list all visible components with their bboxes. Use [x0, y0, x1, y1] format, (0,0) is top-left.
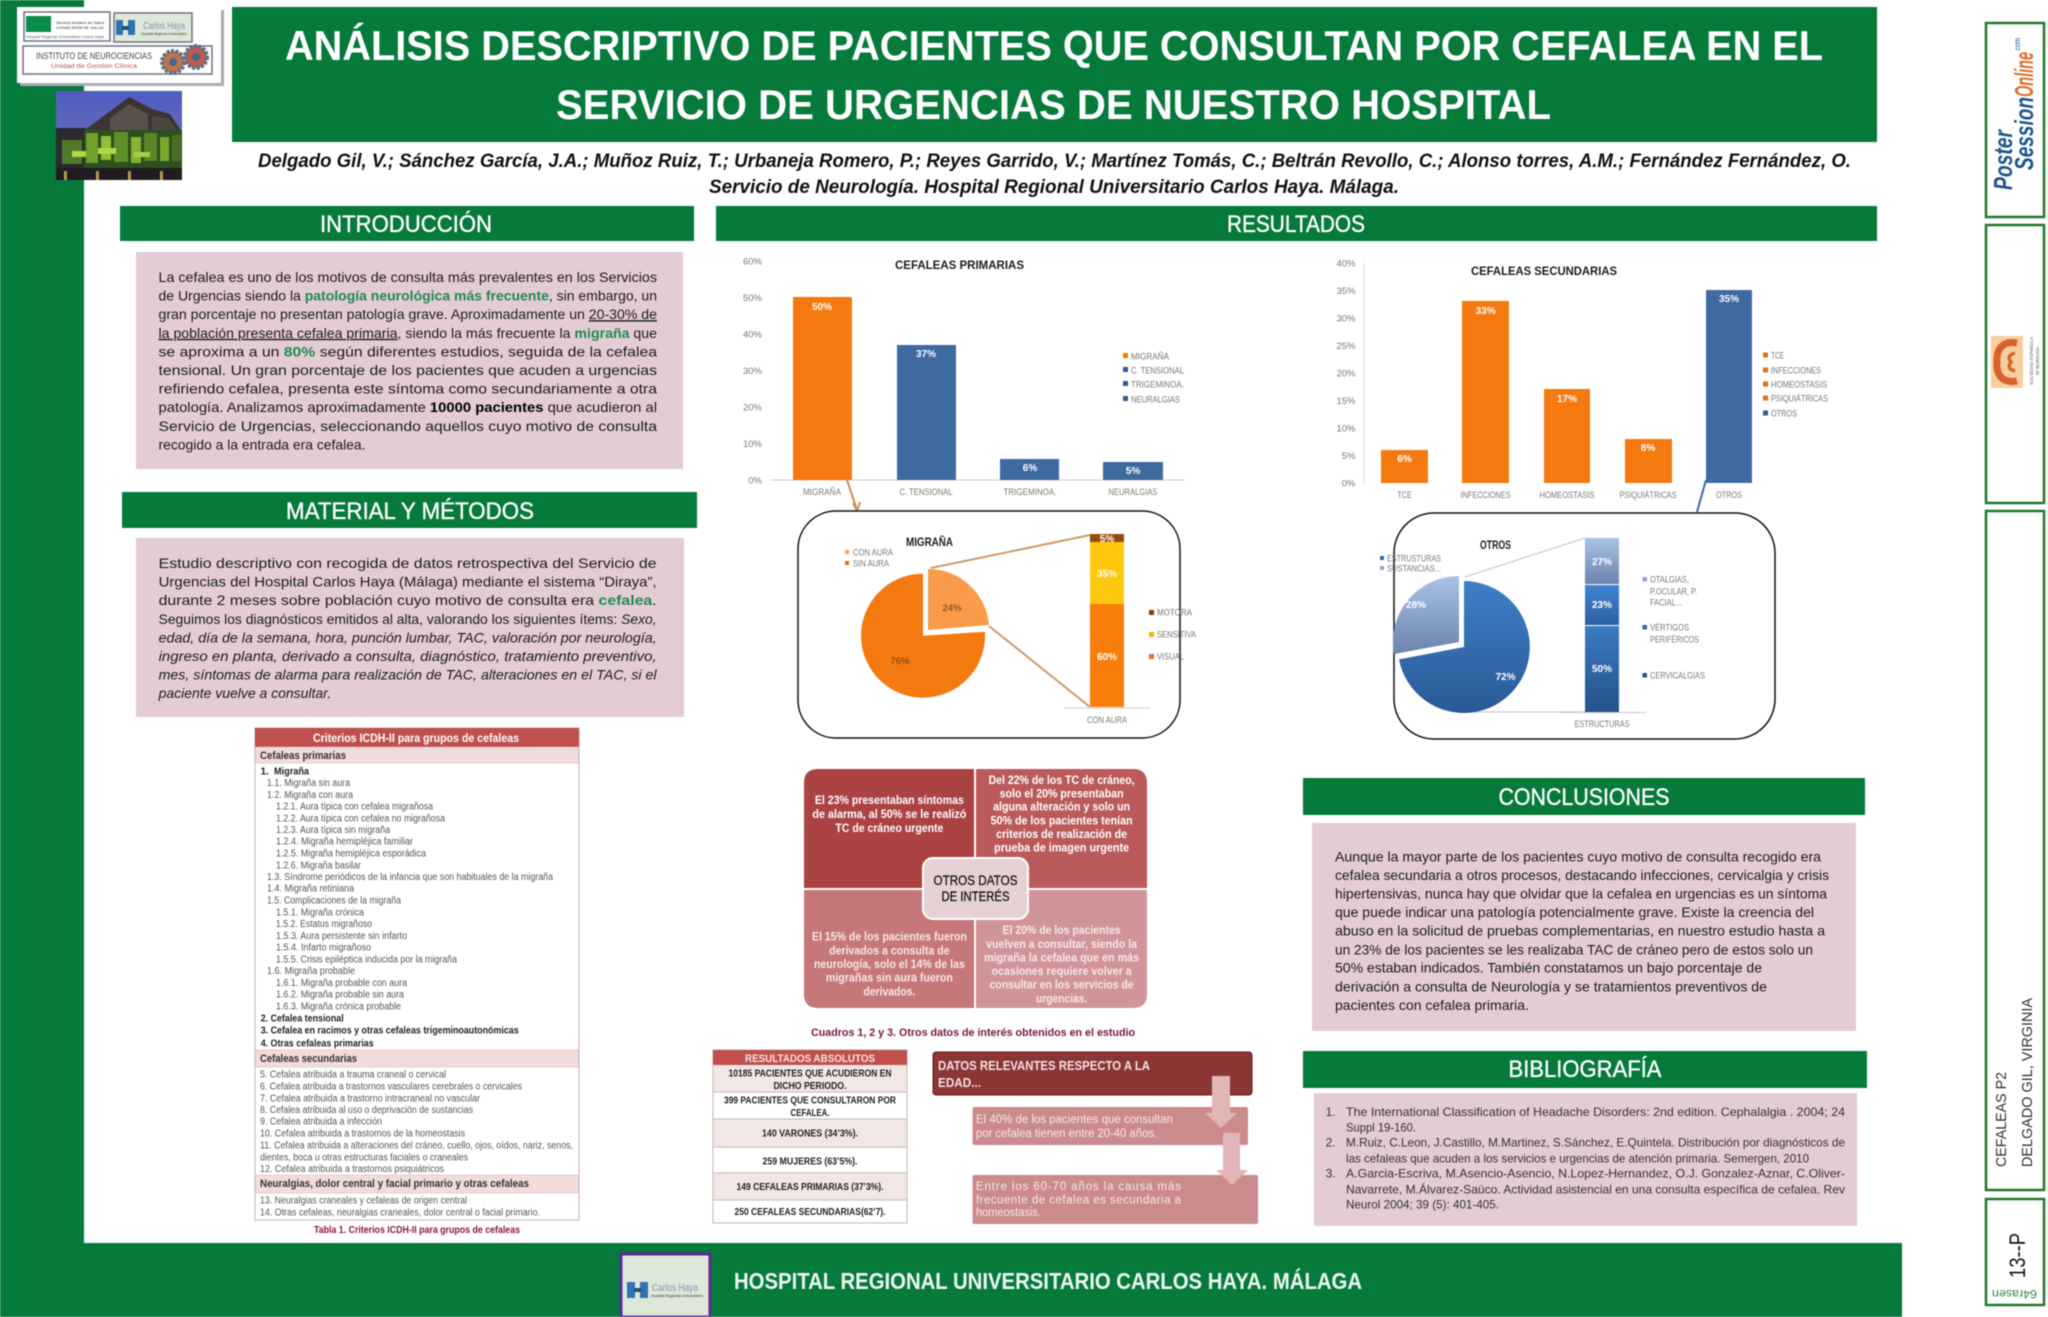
side legend: SENSITIVA: [1157, 630, 1197, 640]
side box: PosterSessionOnline logo: Poster: [1988, 129, 2018, 190]
logo: Servicio Andaluz de Salud: Servicio Andaluz de Salud: [56, 20, 104, 25]
table rows: 149 CEFALEAS PRIMARIAS (37’3%).: [736, 1182, 884, 1193]
section: cefaleas primarias: 1.: [260, 767, 269, 778]
table rows: 10185 PACIENTES QUE ACUDIERON EN: [728, 1069, 892, 1080]
panel: bibliografía: Suppl 19-160.: [1346, 1120, 1416, 1134]
heading: resultados: [716, 206, 1877, 241]
section: cefaleas primarias: Migraña: [274, 767, 309, 778]
y axis labels: 40%: [1336, 258, 1356, 270]
legend: TCE: [1771, 350, 1784, 362]
panel: conclusiones: derivación a consulta de Neurología y se tratamientos preventivos de: [1335, 978, 1767, 994]
table rows: 140 VARONES (34’3%).: [762, 1129, 858, 1140]
arrow: otros to detail: [1697, 480, 1706, 512]
panel: conclusiones: que puede indicar una patología potencialmente grave. Existe la creencia del: [1335, 904, 1814, 920]
y axis labels: 35%: [1336, 286, 1356, 297]
panel: introducción: [136, 252, 683, 469]
table caption: Tabla 1. Criterios ICDH-II para grupos de cefaleas: [314, 1225, 520, 1236]
panel: introducción: de Urgencias siendo la patología neurológica más frecuente, sin embargo, un: [158, 288, 657, 304]
quadrant: vuelven a consultar: consultar en los servicios de: [990, 978, 1134, 992]
section: cefaleas primarias: 1.5.2. Estatus migrañoso: [276, 919, 372, 930]
bars: [1381, 290, 1752, 483]
box: 60-70 años: [972, 1175, 1258, 1224]
table rows: [724, 1069, 897, 1218]
table rows: DICHO PERIODO.: [774, 1081, 847, 1092]
section: cefaleas primarias: [256, 747, 578, 1049]
quadrant: derivación a neurología: derivados a consulta de: [829, 944, 950, 958]
section: cefaleas secundarias: 8. Cefalea atribuida al uso o deprivación de sustancias: [260, 1105, 473, 1116]
legend: [845, 548, 894, 570]
side legend: PERIFÉRICOS: [1650, 634, 1699, 646]
authors: Delgado Gil, V.; Sánchez García, J.A.; Muñoz Ruiz, T.; Urbaneja Romero, P.; Reyes Garrido, V.; Martínez Tomás, C.; Beltrán Revollo, C.; Alonso torres, A.M.; Fernández Fernández, O.: [258, 151, 1851, 172]
panel: material y métodos: edad, día de la semana, hora, punción lumbar, TAC, valoración por neurología,: [159, 629, 657, 645]
hospital photo: [56, 91, 182, 180]
stacked bar: 23%: [1592, 600, 1612, 611]
table header: [255, 728, 579, 747]
y axis labels: 20%: [743, 402, 763, 414]
pie chart: [1393, 576, 1530, 713]
panel: bibliografía: The International Classification of Headache Disorders: 2nd edition. Cephalalgia . 2004; 24: [1346, 1105, 1845, 1119]
side legend: CERVICALGIAS: [1650, 670, 1705, 682]
section: cefaleas primarias: 2. Cefalea tensional: [261, 1013, 344, 1024]
stacked bar: 5%: [1100, 534, 1114, 545]
side box: poster data: DELGADO GIL, VIRGINIA: [2019, 998, 2036, 1167]
panel: material y métodos: Urgencias del Hospital Carlos Haya (Málaga) mediante el sistema “Diraya”,: [159, 574, 657, 590]
category labels: INFECCIONES: [1461, 490, 1511, 501]
side box: PosterSessionOnline logo: Session: [2009, 97, 2039, 170]
panel: bibliografía: las cefaleas que acuden a los servicios e urgencias de atención primaria. Semergen, 2010: [1346, 1151, 1809, 1165]
y axis labels: 40%: [743, 330, 763, 340]
panel: material y métodos: durante 2 meses sobre población cuyo motivo de consulta era cefalea .: [159, 592, 657, 608]
legend: MIGRAÑA: [1131, 352, 1170, 362]
side legend: VÉRTIGOS: [1650, 622, 1689, 634]
section: neuralgias: [256, 1175, 578, 1218]
authors: [258, 151, 1851, 198]
side legend: [1642, 574, 1705, 682]
quadrant: TC de cráneo: alguna alteración y solo un: [993, 800, 1130, 814]
section: cefaleas primarias: 3. Cefalea en racimos y otras cefaleas trigeminoautonómicas: [261, 1026, 519, 1037]
side box: poster code: [1986, 1199, 2044, 1305]
quadrant: derivación a neurología: migrañas sin aura fueron: [826, 971, 953, 985]
legend: [1380, 554, 1441, 574]
legend: C. TENSIONAL: [1131, 366, 1184, 376]
panel: material y métodos: Seguimos los diagnósticos emitidos al alta, valorando los siguientes ítems: Sexo,: [159, 611, 657, 627]
logo: Instituto de Neurociencias: [23, 46, 212, 74]
box: 20-40 años: [972, 1107, 1248, 1145]
legend: [1123, 352, 1184, 406]
y axis labels: 10%: [743, 439, 763, 450]
heading box: datos relevantes: [933, 1052, 1252, 1095]
bars: 33%: [1476, 306, 1496, 317]
section: cefaleas secundarias: dientes, boca u otras estructuras faciales o craneales: [260, 1152, 468, 1163]
table header: RESULTADOS ABSOLUTOS: [745, 1053, 875, 1065]
panel: conclusiones: 50% estaban indicados. También constatamos un bajo porcentaje de: [1335, 960, 1762, 976]
panel: bibliografía: Neurol 2004; 39 (5): 401-405.: [1346, 1198, 1499, 1212]
bars: 5%: [1126, 466, 1140, 477]
side box: poster code: 64rasen: [1992, 1287, 2037, 1301]
connector lines: [1464, 538, 1585, 712]
legend: TRIGEMINOA.: [1131, 380, 1184, 390]
footer logo: Carlos Haya: [652, 1283, 698, 1294]
bars: 37%: [916, 349, 936, 360]
box: 60-70 años: homeostasis.: [976, 1207, 1041, 1219]
panel: conclusiones: un 23% de los pacientes se les realizaba TAC de cráneo pero de estos solo un: [1335, 941, 1813, 957]
section: cefaleas primarias: 1.4. Migraña retiniana: [267, 884, 354, 895]
heading: conclusiones: CONCLUSIONES: [1498, 784, 1670, 811]
panel: introducción: refiriendo cefalea, presenta este síntoma como secundariamente a otra: [158, 381, 657, 397]
stacked bar: 35%: [1097, 569, 1117, 580]
section: cefaleas primarias: 1.6.3. Migraña crónica probable: [276, 1002, 401, 1013]
legend: [1763, 350, 1828, 420]
quadrant: derivación a neurología: El 15% de los pacientes fueron: [812, 930, 967, 944]
legend: SIN AURA: [853, 558, 890, 570]
quadrant: vuelven a consultar: migraña la cefalea que en más: [984, 950, 1139, 964]
box: 20-40 años: El 40% de los pacientes que consultan: [976, 1114, 1173, 1126]
category labels: OTROS: [1716, 490, 1742, 501]
y axis labels: 30%: [1336, 314, 1356, 324]
quadrant: TC de cráneo: [976, 769, 1147, 888]
section: cefaleas secundarias: [256, 1050, 578, 1175]
section: cefaleas primarias: 1.5.4. Infarto migrañoso: [276, 943, 371, 954]
bars: 6%: [1397, 454, 1412, 465]
matrix caption: Cuadros 1, 2 y 3. Otros datos de interés obtenidos en el estudio: [811, 1027, 1135, 1039]
category labels: TCE: [1398, 490, 1412, 501]
quadrant: síntomas de alarma: El 23% presentaban síntomas: [815, 793, 964, 807]
footer logo: Hospital Regional Universitario: [651, 1293, 704, 1298]
bar chart: cefaleas secundarias: [1336, 258, 1828, 501]
connector lines: [931, 535, 1090, 707]
panel: conclusiones: [1312, 823, 1856, 1031]
quadrant: síntomas de alarma: de alarma, al 50% se le realizó: [812, 807, 966, 821]
panel: introducción: La cefalea es uno de los motivos de consulta más prevalentes en los Servicios: [158, 269, 657, 285]
chart title: CEFALEAS PRIMARIAS: [895, 258, 1024, 272]
section: cefaleas primarias: 1.2.5. Migraña hemipléjica esporádica: [276, 848, 426, 859]
section: cefaleas primarias: 1.5.1. Migraña crónica: [276, 907, 364, 918]
category labels: C. TENSIONAL: [900, 487, 952, 498]
side box: Sociedad Española de Neurología logo: DE NEUROLOGÍA: [2034, 347, 2040, 375]
panel: introducción: tensional. Un gran porcentaje de los pacientes que acuden a urgencias: [158, 362, 657, 378]
heading: bibliografía: [1303, 1051, 1867, 1088]
section: cefaleas primarias: 1.3. Síndrome periódicos de la infancia que son habituales de la migraña: [267, 872, 553, 883]
logos block: [17, 7, 224, 86]
legend: ESTRUSTURAS: [1387, 554, 1441, 564]
heading: material y métodos: MATERIAL Y MÉTODOS: [286, 498, 534, 525]
heading: bibliografía: BIBLIOGRAFÍA: [1508, 1056, 1662, 1083]
panel: introducción: recogido a la entrada era cefalea.: [158, 436, 366, 452]
section: cefaleas primarias: 1.1. Migraña sin aura: [267, 778, 350, 789]
title banner: [232, 7, 1877, 142]
title line 2: SERVICIO DE URGENCIAS DE NUESTRO HOSPITAL: [556, 81, 1551, 128]
panel: introducción: la población presenta cefalea primaria, siendo la más frecuente la migraña que: [158, 325, 657, 341]
affiliation: Servicio de Neurología. Hospital Regional Universitario Carlos Haya. Málaga.: [709, 177, 1399, 198]
panel: conclusiones: hipertensivas, nunca hay que olvidar que la cefalea en urgencias es un síntoma: [1335, 886, 1827, 902]
chart title: OTROS: [1480, 538, 1511, 552]
table: criterios ICDH-II: [255, 728, 579, 1220]
stacked bar: 60%: [1097, 652, 1117, 663]
y axis labels: 0%: [748, 476, 763, 486]
arrow: down 1: [1205, 1076, 1237, 1128]
y axis labels: 30%: [743, 366, 763, 377]
bars: 8%: [1641, 443, 1655, 454]
category labels: PSIQUIÁTRICAS: [1620, 490, 1676, 501]
section: cefaleas secundarias: 6. Cefalea atribuida a trastornos vasculares cerebrales o cervicales: [260, 1081, 522, 1092]
y axis labels: 10%: [1336, 424, 1356, 434]
y axis labels: 5%: [1342, 451, 1356, 462]
section: cefaleas primarias: Cefaleas primarias: [260, 750, 346, 762]
y axis labels: [743, 256, 763, 486]
center box: [923, 858, 1028, 919]
y axis labels: 25%: [1336, 341, 1356, 352]
quadrant: vuelven a consultar: vuelven a consultar, siendo la: [986, 937, 1137, 951]
quadrant: TC de cráneo: criterios de realización de: [996, 827, 1127, 841]
heading box: datos relevantes: DATOS RELEVANTES RESPECTO A LA: [938, 1058, 1151, 1073]
panel: bibliografía: M.Ruiz, C.Leon, J.Castillo, M.Martinez, S.Sánchez, E.Quintela. Distribución por diagnósticos de: [1346, 1136, 1845, 1150]
stacked bar: [1064, 534, 1150, 726]
section: neuralgias: 13. Neuralgias craneales y cefaleas de origen central: [260, 1196, 467, 1207]
panel: otros detail chart: [1380, 513, 1775, 739]
logo: Carlos Haya: Hospital Regional Universitario: [141, 32, 187, 36]
panel: bibliografía: 2.: [1326, 1136, 1336, 1150]
legend: PSIQUIÁTRICAS: [1771, 394, 1828, 404]
chart title: MIGRAÑA: [906, 534, 953, 549]
quadrant: TC de cráneo: 50% de los pacientes tenían: [991, 814, 1133, 828]
title line 1: ANÁLISIS DESCRIPTIVO DE PACIENTES QUE CONSULTAN POR CEFALEA EN EL: [285, 22, 1823, 69]
section: cefaleas primarias: 1.5. Complicaciones de la migraña: [267, 895, 401, 906]
quadrant: derivación a neurología: neurología, solo el 14% de las: [814, 957, 965, 971]
heading box: datos relevantes: EDAD...: [938, 1075, 981, 1090]
section: cefaleas primarias: 1.2.6. Migraña basilar: [276, 860, 362, 871]
panel: material y métodos: paciente vuelve a consultar.: [158, 685, 331, 701]
quadrant: vuelven a consultar: urgencias.: [1036, 991, 1087, 1005]
section: cefaleas primarias: 1.5.3. Aura persistente sin infarto: [276, 931, 407, 942]
section: cefaleas secundarias: Cefaleas secundarias: [260, 1053, 357, 1065]
side legend: P.OCULAR, P.: [1650, 586, 1697, 598]
center box: OTROS DATOS: [934, 872, 1018, 888]
side box: PosterSessionOnline logo: .com: [2013, 38, 2022, 52]
y axis labels: 0%: [1342, 478, 1356, 490]
logo: Carlos Haya: [114, 13, 192, 42]
box: 60-70 años: frecuente de cefalea es secundaria a: [976, 1194, 1182, 1206]
panel: conclusiones: Aunque la mayor parte de los pacientes cuyo motivo de consulta recogido era: [1335, 848, 1821, 864]
quadrant: TC de cráneo: prueba de imagen urgente: [994, 841, 1129, 855]
quadrant: derivación a neurología: [804, 890, 974, 1008]
quadrant: síntomas de alarma: [804, 769, 974, 888]
section: cefaleas secundarias: 11. Cefalea atribuida a alteraciones del cráneo, cuello, ojos, oídos, nariz, senos,: [260, 1140, 573, 1151]
category labels: NEURALGIAS: [1108, 487, 1158, 498]
center box: DE INTERÉS: [942, 888, 1010, 904]
panel: introducción: gran porcentaje no presentan patología grave. Aproximadamente un 20-30% de: [158, 306, 657, 322]
heading: introducción: [120, 206, 694, 241]
chart title: CEFALEAS SECUNDARIAS: [1471, 264, 1617, 278]
quadrant: vuelven a consultar: [976, 890, 1147, 1008]
side box: PosterSessionOnline logo: [1986, 23, 2044, 217]
quadrant: TC de cráneo: solo el 20% presentaban: [1000, 786, 1124, 800]
category labels: [803, 487, 1158, 498]
stacked bar: [1560, 538, 1646, 730]
heading: introducción: INTRODUCCIÓN: [320, 211, 492, 238]
legend: SUSTANCIAS...: [1387, 564, 1441, 574]
side legend: VISUAL: [1157, 652, 1184, 662]
arrow: migraña to detail: [847, 480, 860, 511]
section: cefaleas primarias: 4. Otras cefaleas primarias: [261, 1038, 374, 1049]
logo: Carlos Haya: Carlos Haya: [143, 21, 185, 32]
side legend: FACIAL...: [1650, 598, 1682, 608]
section: neuralgias: 14. Otras cefaleas, neuralgias craneales, dolor central o facial primario.: [260, 1207, 540, 1218]
table: resultados absolutos: [713, 1050, 907, 1223]
bar chart: cefaleas primarias: [743, 256, 1185, 498]
bars: 50%: [812, 302, 832, 313]
matrix: otros datos de interés: [804, 769, 1147, 1008]
section: cefaleas secundarias: 9. Cefalea atribuida a infección: [260, 1117, 382, 1128]
bars: 17%: [1557, 394, 1577, 405]
heading: material y métodos: [122, 492, 697, 528]
stacked bar: CON AURA: [1087, 715, 1128, 726]
category labels: [1398, 490, 1742, 501]
quadrant: derivación a neurología: derivados.: [863, 984, 915, 998]
panel: material y métodos: mes, síntomas de alarma para realización de TAC, alteraciones en el TAC, si el: [159, 667, 657, 683]
quadrant: síntomas de alarma: TC de cráneo urgente: [835, 821, 944, 835]
section: cefaleas primarias: 1.5.5. Crisis epiléptica inducida por la migraña: [276, 954, 457, 965]
panel: material y métodos: Estudio descriptivo con recogida de datos retrospectiva del Servicio de: [159, 555, 657, 571]
pie chart: 28%: [1406, 600, 1426, 611]
legend: OTROS: [1771, 408, 1797, 420]
side legend: OTALGIAS,: [1650, 574, 1689, 586]
section: cefaleas primarias: 1.2. Migraña con aura: [267, 790, 353, 801]
panel: conclusiones: cefalea secundaria a otros procesos, destacando infecciones, cervicalgia y crisis: [1335, 867, 1829, 883]
arrow: down 2: [1216, 1133, 1248, 1185]
section: cefaleas secundarias: 10. Cefalea atribuida a trastornos de la homeostasis: [260, 1128, 465, 1139]
y axis labels: [1336, 258, 1356, 490]
box: 20-40 años: por cefalea tienen entre 20-40 años.: [976, 1128, 1157, 1140]
category labels: MIGRAÑA: [803, 487, 842, 498]
category labels: TRIGEMINOA.: [1004, 487, 1056, 498]
y axis labels: 20%: [1336, 368, 1356, 380]
side box: poster code: 13--P: [2005, 1233, 2030, 1278]
legend: INFECCIONES: [1771, 366, 1821, 376]
logo: Servicio Andaluz de Salud: CONSEJERÍA DE SALUD: [56, 25, 104, 30]
footer band: [0, 1243, 1902, 1317]
side box: Sociedad Española de Neurología logo: [1986, 225, 2044, 503]
bars: 6%: [1023, 463, 1037, 474]
side box: poster data: [1986, 511, 2044, 1190]
side box: PosterSessionOnline logo: Online: [2009, 52, 2039, 97]
y axis labels: 50%: [743, 293, 763, 304]
y axis labels: 15%: [1336, 396, 1356, 407]
left green sidebar: [0, 0, 84, 1250]
logo: Servicio Andaluz de Salud: Hospital Regional Universitario Carlos Haya: [26, 35, 105, 39]
table rows: CEFALEA.: [790, 1108, 830, 1119]
logo: Instituto de Neurociencias: INSTITUTO DE NEUROCIENCIAS: [36, 51, 152, 61]
panel: material y métodos: ingreso en planta, derivado a consulta, diagnóstico, tratamiento preventivo,: [159, 648, 657, 664]
section: cefaleas primarias: 1.6.2. Migraña probable sin aura: [276, 990, 404, 1001]
bars: 35%: [1719, 294, 1739, 305]
panel: bibliografía: A.Garcia-Escriva, M.Asencio-Asencio, N.Lopez-Hernandez, O.J. Gonzalez-Aznar, C.Oliver-: [1346, 1167, 1845, 1181]
pie chart: 24%: [942, 603, 962, 614]
section: cefaleas secundarias: 12. Cefalea atribuida a trastornos psiquiátricos: [260, 1164, 444, 1175]
panel: bibliografía: Navarrete, M.Álvarez-Saúco. Actividad asistencial en una consulta específica de cefalea. Rev: [1346, 1181, 1845, 1196]
panel: conclusiones: abuso en la solicitud de pruebas complementarias, en nuestro estudio hasta a: [1335, 923, 1825, 939]
panel: introducción: patología. Analizamos aproximadamente 10000 pacientes que acudieron al: [158, 399, 657, 415]
quadrant: vuelven a consultar: ocasiones requiere volver a: [992, 964, 1132, 978]
table rows: 399 PACIENTES QUE CONSULTARON POR: [724, 1095, 897, 1106]
legend: CON AURA: [853, 548, 894, 558]
table rows: 250 CEFALEAS SECUNDARIAS(62’7).: [734, 1207, 886, 1218]
panel: conclusiones: pacientes con cefalea primaria.: [1335, 997, 1529, 1013]
pie chart: 76%: [890, 656, 910, 667]
panel: bibliografía: [1314, 1093, 1857, 1226]
legend: NEURALGIAS: [1131, 394, 1180, 406]
side legend: [1149, 608, 1197, 662]
y axis labels: 60%: [743, 256, 763, 268]
quadrant: vuelven a consultar: El 20% de los pacientes: [1003, 923, 1121, 937]
section: cefaleas primarias: 1.2.2. Aura típica con cefalea no migrañosa: [276, 813, 445, 824]
side box: poster data: CEFALEAS P2: [1993, 1072, 2010, 1167]
footer text: HOSPITAL REGIONAL UNIVERSITARIO CARLOS HAYA. MÁLAGA: [734, 1267, 1362, 1294]
stacked bar: ESTRUCTURAS: [1574, 719, 1630, 730]
section: cefaleas primarias: 1.2.3. Aura típica sin migraña: [276, 825, 390, 836]
section: neuralgias: Neuralgias, dolor central y facial primario y otras cefaleas: [260, 1178, 529, 1190]
section: cefaleas primarias: 1.6. Migraña probable: [267, 966, 355, 977]
legend: HOMEOSTASIS: [1771, 380, 1827, 390]
heading: resultados: RESULTADOS: [1227, 211, 1365, 238]
panel: material y métodos: [136, 538, 684, 717]
pie chart: [861, 569, 989, 698]
category labels: HOMEOSTASIS: [1540, 490, 1594, 501]
section: cefaleas primarias: 1.2.4. Migraña hemipléjica familiar: [276, 837, 414, 848]
panel: bibliografía: 3.: [1326, 1167, 1336, 1181]
panel: introducción: Servicio de Urgencias, seleccionando aquellos cuyo motivo de consulta: [158, 418, 657, 434]
stacked bar: 50%: [1592, 664, 1612, 675]
panel: migraña detail chart: [798, 511, 1197, 738]
bars: [793, 297, 1163, 480]
heading: conclusiones: [1303, 778, 1865, 815]
section: cefaleas primarias: 1.6.1. Migraña probable con aura: [276, 978, 407, 989]
panel: bibliografía: 1.: [1326, 1105, 1336, 1119]
pie chart: 72%: [1495, 672, 1516, 683]
logo: Servicio Andaluz de Salud: [24, 12, 110, 41]
table header: [713, 1050, 907, 1065]
side legend: MOTORA: [1157, 608, 1193, 618]
table rows: 259 MUJERES (63’5%).: [762, 1156, 858, 1167]
logo: Instituto de Neurociencias: Unidad de Gestión Clínica: [51, 63, 137, 70]
quadrant: TC de cráneo: Del 22% de los TC de cráneo,: [989, 773, 1135, 787]
panel: introducción: se aproxima a un 80% según diferentes estudios, seguida de la cefalea: [158, 343, 657, 359]
section: cefaleas secundarias: 5. Cefalea atribuida a trauma craneal o cervical: [260, 1070, 446, 1081]
stacked bar: 27%: [1592, 557, 1612, 568]
side box: Sociedad Española de Neurología logo: SOCIEDAD ESPAÑOLA: [2028, 337, 2034, 385]
section: cefaleas secundarias: 7. Cefalea atribuida a trastorno intracraneal no vascular: [260, 1093, 481, 1104]
footer logo: [621, 1254, 710, 1317]
table header: Criterios ICDH-II para grupos de cefaleas: [313, 733, 519, 745]
section: cefaleas primarias: 1.2.1. Aura típica con cefalea migrañosa: [276, 802, 433, 813]
box: 60-70 años: Entre los 60-70 años la causa más: [976, 1181, 1181, 1193]
